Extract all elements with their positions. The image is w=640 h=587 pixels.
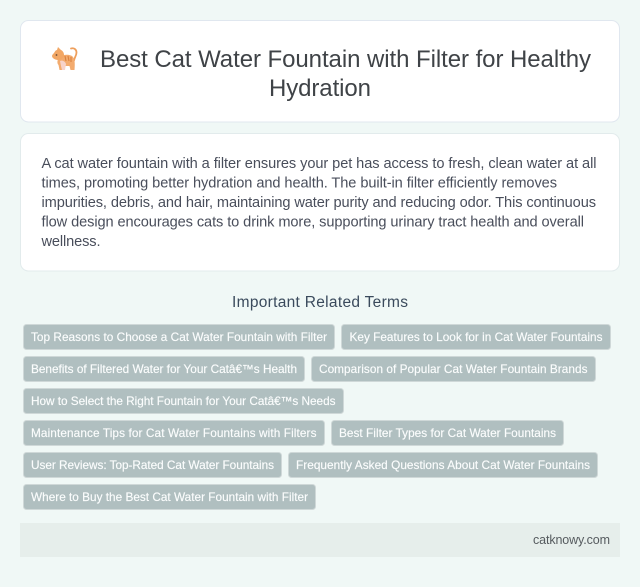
- tag: Where to Buy the Best Cat Water Fountain with Filter: [31, 490, 308, 504]
- tag: Best Filter Types for Cat Water Fountains: [339, 426, 556, 440]
- heading: important related terms: Important Related Terms: [232, 294, 408, 311]
- tag: [24, 420, 324, 446]
- tag: [342, 324, 610, 350]
- title: [100, 46, 591, 102]
- tag: Key Features to Look for in Cat Water Fountains: [350, 330, 603, 344]
- tag: [24, 452, 282, 478]
- tag: Benefits of Filtered Water for Your Catâ€™s Health: [31, 362, 297, 376]
- footer source text: catknowy.com: [533, 533, 610, 547]
- tag: User Reviews: Top-Rated Cat Water Fountains: [31, 458, 274, 472]
- tag: Top Reasons to Choose a Cat Water Fountain with Filter: [31, 330, 327, 344]
- tag: How to Select the Right Fountain for Your Catâ€™s Needs: [31, 394, 336, 408]
- description text: [40, 156, 596, 250]
- tag: [24, 388, 344, 414]
- description text: A cat water fountain with a filter ensures your pet has access to fresh, clean water at all: [42, 156, 596, 172]
- title: Hydration: [269, 75, 371, 102]
- title: Best Cat Water Fountain with Filter for Healthy: [100, 46, 591, 73]
- tag: Maintenance Tips for Cat Water Fountains with Filters: [31, 426, 317, 440]
- description text: impurities, debris, and hair, maintaining water purity and reducing odor. This continuous: [42, 195, 596, 211]
- footer bar: [20, 523, 620, 557]
- tag: [24, 484, 316, 510]
- description text: wellness.: [40, 234, 100, 250]
- tag: [24, 356, 304, 382]
- panel: description card: [20, 134, 620, 271]
- panel: title card: [20, 20, 620, 122]
- tag: [332, 420, 564, 446]
- tag: Comparison of Popular Cat Water Fountain Brands: [319, 362, 588, 376]
- tag: [288, 452, 598, 478]
- icon: orange cat: [52, 47, 76, 70]
- tag list: [24, 324, 610, 510]
- tag: Frequently Asked Questions About Cat Water Fountains: [296, 458, 590, 472]
- description text: times, promoting better hydration and health. The built-in filter efficiently removes: [42, 176, 557, 192]
- tag: [312, 356, 596, 382]
- tag: [24, 324, 334, 350]
- description text: flow design encourages cats to drink more, supporting urinary tract health and overall: [42, 214, 584, 230]
